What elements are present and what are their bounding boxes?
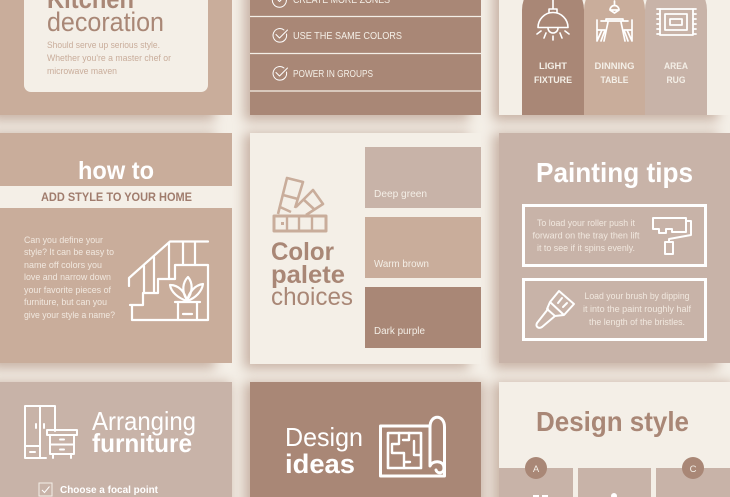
badge A: A <box>533 464 540 475</box>
heading: design ideas: Design <box>285 422 363 452</box>
card <box>24 0 208 92</box>
icon: wardrobe and drawers <box>25 406 77 458</box>
heading: color palete choices: choices <box>271 283 353 311</box>
body text: Should serve up serious style. <box>47 40 160 51</box>
icon: rug <box>657 9 696 35</box>
paragraph <box>24 235 115 321</box>
arch: area rug: AREA <box>664 61 688 72</box>
tip: roller: To load your roller push it <box>537 218 635 229</box>
swatch: dark purple: Dark purple <box>374 326 425 337</box>
swatch: warm brown: Warm brown <box>374 259 429 270</box>
tip: brush <box>524 280 706 340</box>
tip: roller <box>524 206 706 266</box>
tip: roller: forward on the tray then lift <box>532 230 640 242</box>
badge A <box>525 457 547 479</box>
paragraph: style? It can be easy to <box>24 247 114 258</box>
swatch: deep green: Deep green <box>374 189 427 200</box>
arch: dinning table: TABLE <box>600 75 628 86</box>
icon: paint roller <box>653 218 691 254</box>
item: create more zones <box>272 0 390 7</box>
body text <box>47 40 171 77</box>
paragraph: love and narrow down <box>24 272 111 283</box>
heading: design style: Design style <box>536 406 689 437</box>
body text: Whether you're a master chef or <box>47 53 171 64</box>
panel: color palette <box>250 133 481 364</box>
heading: how to: how to <box>78 157 154 185</box>
tip: roller: it to see if it spins evenly. <box>537 243 635 254</box>
item: power in groups: POWER IN GROUPS <box>293 68 373 80</box>
panel: design style <box>499 382 730 497</box>
card: style A <box>499 468 573 497</box>
tip: brush: Load your brush by dipping <box>584 291 690 302</box>
panel: painting tips <box>499 133 730 363</box>
heading: design ideas: ideas <box>285 449 355 479</box>
icon: swatch fan <box>274 178 326 231</box>
icon: dining table <box>597 1 632 41</box>
checklist item: choose a focal point <box>39 483 159 496</box>
panel: how to add style <box>0 133 232 363</box>
tip: brush: it into the paint roughly half <box>583 304 691 315</box>
card: style C <box>656 468 730 497</box>
banner: ADD STYLE TO YOUR HOME <box>41 192 192 204</box>
heading: arranging furniture <box>92 406 196 458</box>
item: use the same colors <box>273 29 402 42</box>
arch: area rug: RUG <box>666 75 686 86</box>
paragraph: Can you define your <box>24 235 103 246</box>
paragraph: furniture, but can you <box>24 297 107 308</box>
paragraph: give your style a name? <box>24 310 115 321</box>
icon: pendant lamp <box>537 0 569 40</box>
paragraph: name off colors you <box>24 260 102 271</box>
heading: color palete choices: Color <box>271 238 334 266</box>
paragraph: your favorite pieces of <box>24 285 111 296</box>
panel: checklist <box>250 0 481 115</box>
panel: arranging furniture <box>0 382 232 497</box>
swatch: warm brown <box>365 217 481 278</box>
arch: light fixture: LIGHT <box>539 61 567 72</box>
heading: color palete choices <box>271 238 353 311</box>
panel: kitchen decoration <box>0 0 232 115</box>
panel: design ideas <box>250 382 481 497</box>
swatch: dark purple <box>365 287 481 348</box>
arch: light fixture <box>522 0 584 115</box>
body text: microwave maven <box>47 66 117 77</box>
item: power in groups <box>273 67 373 80</box>
heading: painting tips: Painting tips <box>536 157 693 188</box>
arch: area rug <box>645 0 707 115</box>
checklist item: choose a focal point: Choose a focal point <box>60 485 159 496</box>
swatch: deep green <box>365 147 481 208</box>
icon: floor plan <box>380 417 444 476</box>
arch: light fixture: FIXTURE <box>534 75 572 86</box>
tip: brush: the length of the bristles. <box>589 317 685 328</box>
panel: arches <box>499 0 730 115</box>
icon: paint brush <box>536 291 574 328</box>
badge C <box>682 457 704 479</box>
heading: kitchen decoration: decoration <box>47 7 164 37</box>
card: style B <box>578 468 651 497</box>
heading: color palete choices: palete <box>271 261 345 289</box>
arch: dinning table: DINNING <box>594 61 634 72</box>
icon: stairs and plant <box>129 242 208 320</box>
arch: dinning table <box>584 0 645 115</box>
heading: arranging furniture: Arranging <box>92 406 196 436</box>
heading: design ideas <box>285 422 363 479</box>
heading: arranging furniture: furniture <box>92 428 192 458</box>
banner <box>0 186 232 208</box>
item: use the same colors: USE THE SAME COLORS <box>293 30 402 42</box>
badge C: C <box>690 464 697 475</box>
